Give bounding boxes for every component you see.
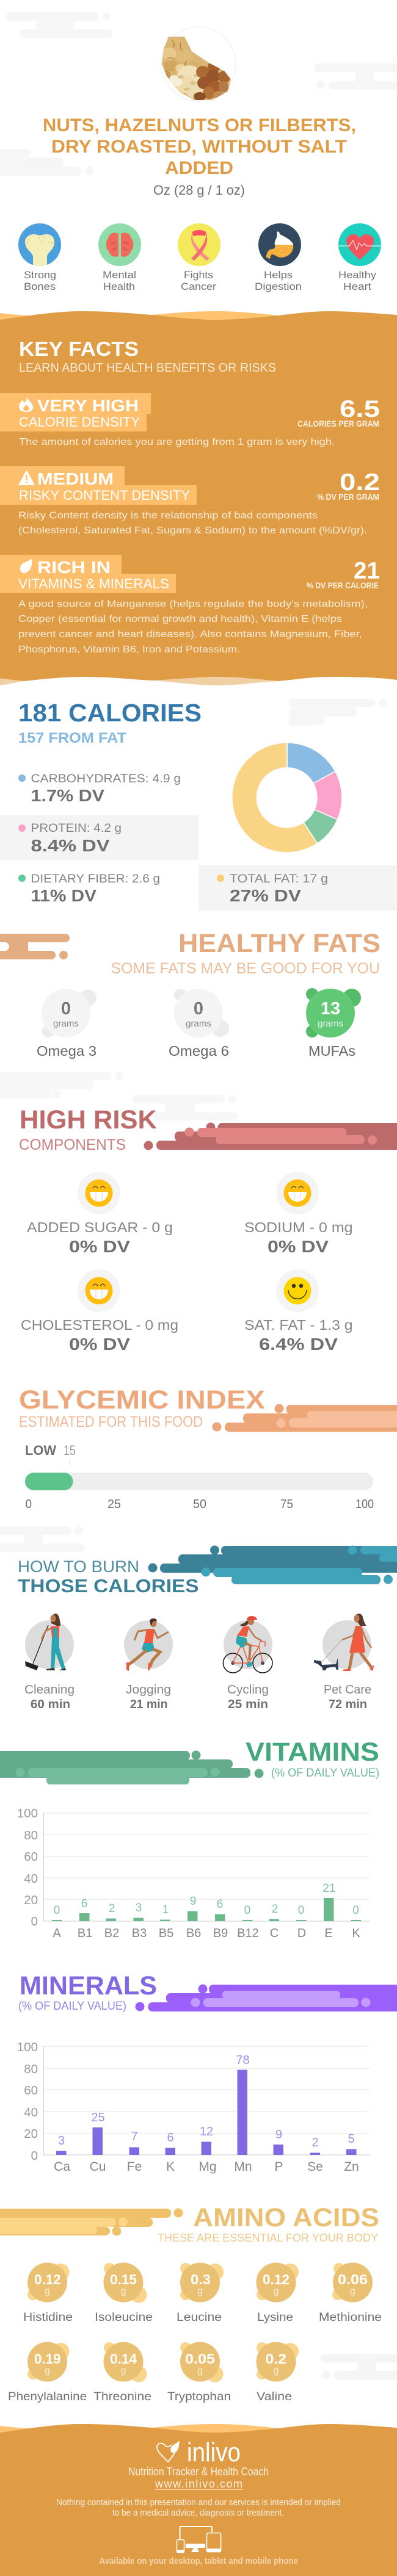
fact: rich in vitamins and minerals: VITAMINS & MINERALS [18,576,169,591]
logo: inlivo [157,2437,241,2467]
fact: risky content density: 0.2 [340,469,380,496]
amino: histidine: g [45,2286,50,2296]
burn heading: THOSE CALORIES [18,1575,199,1596]
amino: methionine: Methionine [319,2311,382,2324]
bar chart: minerals: Ca [54,2160,70,2174]
stat: omega 6 [169,989,229,1059]
key facts heading: KEY FACTS [19,337,139,360]
risk: saturated fat: SAT. FAT - 1.3 g [244,1317,353,1333]
risk: added sugar: ADDED SUGAR - 0 g [27,1219,173,1235]
risk: saturated fat [244,1269,353,1354]
bar chart: vitamins: B12 [237,1927,259,1940]
legend: carbohydrates: 1.7% DV [31,786,104,805]
legend: total fat: TOTAL FAT: 17 g [230,873,328,886]
tagline and link: www.inlivo.com [155,2478,242,2490]
fact: risky content density: MEDIUM [37,469,114,488]
bar chart: minerals: 12 [200,2125,213,2138]
bar chart: minerals: 100 [17,2040,38,2054]
risk: sodium: SODIUM - 0 mg [244,1219,353,1235]
high risk heading: COMPONENTS [19,1136,126,1153]
icon: grin face [283,1179,311,1207]
bar chart: vitamins: D [297,1927,306,1940]
highlight panels [0,815,397,911]
label: mental health: Mental [103,269,136,281]
panel: amino acids [0,2203,382,2403]
amino: leucine: g [197,2286,203,2296]
minerals heading [18,1971,157,2013]
bar chart: vitamins: C [270,1927,279,1940]
stat: omega 3 [37,989,97,1059]
panel: healthy fats [0,929,381,1059]
bar chart: minerals: 40 [24,2105,38,2120]
icon: grin face [86,1179,112,1207]
bar chart: minerals: 0 [31,2149,38,2163]
glycemic value: 15 [64,1443,76,1458]
stat: MUFAs: MUFAs [308,1043,355,1059]
fact: rich in vitamins and minerals: Copper (essential for normal growth and health), Vitamin E (helps [18,614,342,624]
fact: calorie density: 6.5 [340,396,380,422]
decorative band: purple [136,1985,397,2011]
vitamins heading: VITAMINS [246,1737,379,1767]
decorative band: yellow [0,2208,183,2236]
bar chart: minerals: 20 [24,2127,38,2141]
decorative band: orange [213,1404,397,1432]
glycemic heading: GLYCEMIC INDEX [19,1385,265,1415]
bar chart: minerals: 80 [24,2062,38,2076]
decorative band: green [0,1750,264,1784]
fact: calorie density: VERY HIGH [37,396,139,415]
panel: high risk components [19,1105,397,1354]
gauge axis: 100 [355,1498,374,1511]
bar chart: vitamins: K [352,1927,360,1940]
icon: person cycling [223,1616,272,1673]
bar chart: vitamins: 0 [298,1904,304,1917]
key facts heading: LEARN ABOUT HEALTH BENEFITS OR RISKS [19,361,276,375]
minerals heading: MINERALS [20,1971,157,2001]
bar chart: vitamins: 0 [31,1914,38,1928]
bar chart: minerals: Cu [90,2160,106,2174]
background cloud: calories [289,699,387,726]
bar chart: vitamins: B1 [78,1927,92,1940]
legend: total fat [217,873,328,905]
bar chart: minerals [17,2040,370,2174]
label: helps digestion: Helps [264,269,293,281]
risk: cholesterol [21,1269,178,1354]
panel: vitamins [0,1737,379,1940]
amino: isoleucine: g [121,2286,126,2296]
bar chart: vitamins: 1 [162,1903,169,1916]
label: healthy heart: Healthy [338,269,377,281]
amino: tryptophan: g [197,2365,203,2376]
risk: sodium: 0% DV [268,1237,329,1256]
bar chart: minerals: 7 [131,2130,138,2143]
label: mental health [103,269,136,292]
availability note: Available on your desktop, tablet and mobile phone [99,2556,298,2566]
label: healthy heart [338,269,377,292]
title: ADDED [165,158,233,178]
bar chart: vitamins: 60 [24,1850,38,1864]
fact: risky content density: RISKY CONTENT DENSITY [19,488,190,503]
decorative band: red [144,1123,397,1150]
vitamins heading [246,1737,379,1780]
bar chart: vitamins: B9 [213,1927,228,1940]
panel: how to burn those calories [18,1545,397,1711]
bar chart: minerals: P [274,2160,283,2174]
fact: calorie density: CALORIE DENSITY [19,414,140,430]
amino acids heading: AMINO ACIDS [193,2203,379,2232]
icon: devices [177,2527,221,2552]
logo: inlivo: inlivo [187,2437,241,2467]
disclaimer: Nothing contained in this presentation and our services is intended or implied [56,2498,341,2508]
bar chart: minerals: Mg [198,2160,217,2174]
label: strong bones: Strong [24,269,56,281]
amino: tryptophan: 0.05 [185,2351,215,2367]
bar chart: vitamins: 6 [81,1897,87,1910]
hero image: mixed nuts in circle [159,26,236,104]
amino: tryptophan [167,2342,231,2403]
glycemic value: LOW [25,1443,56,1458]
healthy fats heading: HEALTHY FATS [178,929,381,958]
gauge axis: 75 [280,1498,293,1511]
amino: histidine: 0.12 [34,2271,61,2287]
bar chart: vitamins: 2 [272,1903,278,1916]
amino: threonine: Threonine [93,2390,151,2403]
amino: leucine: 0.3 [191,2271,211,2287]
panel: glycemic index [19,1385,397,1511]
bar chart: vitamins: 3 [136,1902,142,1914]
bar chart: minerals: Se [307,2160,323,2174]
icon: leaf [20,558,32,573]
gauge axis: 0 [26,1498,32,1511]
gauge axis [26,1498,374,1511]
amino: valine: 0.2 [265,2351,286,2367]
donut chart [232,743,342,853]
amino: phenylalanine [8,2342,87,2403]
fact: rich in vitamins and minerals: Phosphorus, Vitamin B6, Iron and Potassium. [18,644,240,655]
amino acids heading: THESE ARE ESSENTIAL FOR YOUR BODY [158,2231,378,2244]
amino: isoleucine: 0.15 [110,2271,137,2287]
burn heading: HOW TO BURN [18,1557,139,1576]
bar chart: vitamins: 40 [24,1872,38,1886]
bar chart: vitamins: B6 [186,1927,201,1940]
high risk heading [19,1105,157,1153]
label: fights cancer [181,269,216,292]
bar chart: minerals: K [166,2160,175,2174]
amino: valine [257,2342,299,2403]
activity: cleaning: 60 min [31,1698,70,1711]
activity: pet care: 72 min [329,1698,367,1711]
fact: rich in vitamins and minerals: % DV PER CALORIE [307,580,379,590]
minerals heading: (% OF DAILY VALUE) [18,2000,126,2013]
glycemic heading [19,1385,265,1431]
bar chart: minerals: 78 [236,2054,250,2067]
icon: flame [19,397,33,412]
risk: cholesterol: 0% DV [69,1335,130,1354]
bar chart: minerals: 60 [24,2084,38,2098]
amino: phenylalanine: 0.19 [34,2351,61,2367]
fact: rich in vitamins and minerals [0,555,380,655]
bar chart: vitamins: 0 [244,1904,250,1917]
calories heading: 157 FROM FAT [18,730,126,746]
amino: isoleucine [95,2263,153,2324]
glycemic gauge [25,1473,373,1490]
amino acids heading [158,2203,379,2244]
bar chart: minerals: 6 [167,2131,174,2145]
bar chart: vitamins: A [53,1927,61,1940]
label: helps digestion: Digestion [255,281,302,292]
fact: calorie density [0,393,380,447]
gauge axis: 50 [193,1498,206,1511]
title: NUTS, HAZELNUTS OR FILBERTS, [43,115,356,135]
risk: sodium [244,1172,353,1256]
background cloud: burn [0,1526,85,1552]
bar chart: minerals: 25 [91,2111,105,2124]
bar chart: minerals: 5 [348,2132,355,2146]
stat: omega 6: 0 [194,999,203,1019]
stat: MUFAs: 13 [321,999,340,1019]
amino: lysine: g [274,2286,279,2296]
fact: calorie density: CALORIES PER GRAM [297,419,379,428]
title: DRY ROASTED, WITHOUT SALT [51,137,347,157]
stat: omega 3: grams [53,1019,79,1029]
amino: histidine: Histidine [23,2311,73,2324]
label: strong bones [24,269,56,292]
bar chart: minerals: Mn [234,2160,252,2174]
stat: MUFAs: grams [318,1019,343,1029]
icon: grin face [86,1277,112,1305]
stat: omega 6: grams [186,1019,211,1029]
fact: rich in vitamins and minerals: RICH IN [37,558,111,577]
glycemic value [25,1443,76,1465]
bar chart: minerals: Fe [127,2160,142,2174]
background cloud: amino acids [320,2354,397,2379]
bar chart: vitamins: 0 [54,1904,60,1917]
bar chart: vitamins [17,1806,370,1940]
activity: cycling [223,1616,272,1711]
bar chart: vitamins: B2 [104,1927,119,1940]
icon: person sweeping [25,1614,66,1670]
burn heading [18,1557,199,1596]
activity: jogging: Jogging [126,1683,171,1697]
bar chart: minerals: 9 [275,2128,282,2141]
amino: leucine: Leucine [177,2311,222,2324]
bar chart: vitamins: 0 [352,1904,359,1917]
amino: phenylalanine: Phenylalanine [8,2390,87,2403]
decorative band: teal [148,1545,397,1584]
panel: footer [0,2424,397,2576]
bar chart: vitamins: 80 [24,1828,38,1842]
bar chart: vitamins: 21 [322,1882,336,1895]
panel: key facts [0,311,397,685]
label: fights cancer: Cancer [181,281,216,292]
background clouds: header [0,12,397,176]
amino: threonine [93,2342,151,2403]
activity: jogging: 21 min [130,1698,167,1711]
amino: lysine [257,2263,299,2324]
disclaimer: to be a medical advice, diagnosis or treatment. [112,2508,284,2518]
legend: dietary fiber: 11% DV [31,886,97,905]
fact: risky content density [0,466,380,536]
stat: omega 6: Omega 6 [169,1043,229,1059]
amino: methionine: g [350,2286,355,2296]
calories heading [18,699,202,746]
icon: smile face [283,1277,311,1305]
legend: total fat: 27% DV [230,886,301,905]
label: strong bones: Bones [24,281,56,292]
label: mental health: Health [103,281,135,292]
activity: cleaning [24,1614,75,1711]
healthy fats heading [111,929,381,977]
legend: protein [18,822,122,855]
stat: omega 3: 0 [61,999,71,1019]
label: helps digestion [255,269,302,292]
icon: person walking dog [314,1614,374,1671]
icon: strong bones [18,223,61,269]
activity: cycling: 25 min [228,1698,268,1711]
tagline and link: Nutrition Tracker & Health Coach [128,2466,269,2478]
legend: protein: 8.4% DV [31,836,110,855]
label: healthy heart: Heart [343,281,371,292]
decorative band: tan [0,934,70,959]
glycemic heading: ESTIMATED FOR THIS FOOD [19,1413,203,1431]
icon: healthy heart [338,223,381,266]
background clouds: high risk [0,1072,238,1120]
icon: warning triangle [18,470,35,485]
risk: added sugar: 0% DV [69,1237,130,1256]
tagline and link [128,2466,269,2490]
bar chart: vitamins: E [324,1927,333,1940]
amino: histidine [23,2263,73,2324]
bar chart: vitamins: 6 [217,1898,223,1911]
vitamins heading: (% OF DAILY VALUE) [271,1767,379,1780]
activity: cycling: Cycling [227,1683,269,1697]
amino: isoleucine: Isoleucine [95,2311,153,2324]
panel: minerals [17,1971,397,2174]
panel: calories [0,699,397,911]
fact: rich in vitamins and minerals: 21 [354,558,380,584]
calories heading: 181 CALORIES [18,699,202,727]
amino: lysine: 0.12 [263,2271,290,2287]
bar chart: vitamins: B3 [132,1927,147,1940]
disclaimer [56,2498,341,2518]
fact: rich in vitamins and minerals: A good source of Manganese (helps regulate the body’s metabolism), [18,599,368,609]
stat: omega 3: Omega 3 [37,1043,97,1059]
legend: dietary fiber: DIETARY FIBER: 2.6 g [31,873,160,886]
legend: dietary fiber [18,873,160,905]
amino: methionine: 0.06 [338,2271,368,2287]
activity: jogging [124,1618,173,1711]
fact: rich in vitamins and minerals: prevent cancer and heart diseases). Also contains Magnesium, Fiber, [18,629,362,640]
high risk heading: HIGH RISK [20,1105,157,1135]
activity: pet care: Pet Care [324,1683,371,1697]
activity: cleaning: Cleaning [24,1683,75,1697]
legend: carbohydrates [18,773,181,805]
legend: carbohydrates: CARBOHYDRATES: 4.9 g [31,773,181,785]
bar chart: minerals: Zn [344,2160,359,2174]
benefits row [18,223,381,292]
key facts heading [19,337,276,375]
amino: valine: g [274,2365,279,2376]
stat: MUFAs [306,988,361,1059]
activity: pet care [314,1614,374,1711]
icon: mental health [98,223,141,266]
amino: threonine: 0.14 [110,2351,137,2367]
fact: risky content density: (Cholesterol, Saturated Fat, Sugars & Sodium) to the amount (%DV/gr). [18,525,367,536]
bar chart: minerals: 3 [58,2134,65,2148]
healthy fats heading: SOME FATS MAY BE GOOD FOR YOU [111,960,380,977]
legend: protein: PROTEIN: 4.2 g [31,822,122,835]
fact: calorie density: The amount of calories you are getting from 1 gram is very high. [19,437,335,447]
amino: lysine: Lysine [257,2311,293,2324]
fact: risky content density: Risky Content density is the relationship of bad components [18,510,318,521]
amino: valine: Valine [257,2390,292,2403]
bar chart: minerals: 2 [311,2136,319,2149]
amino: methionine [319,2263,382,2324]
icon: helps digestion [258,223,301,266]
title [43,115,356,178]
risk: saturated fat: 6.4% DV [259,1335,338,1354]
amino: tryptophan: Tryptophan [167,2390,231,2403]
amino: threonine: g [121,2365,126,2376]
gauge axis: 25 [107,1498,121,1511]
risk: cholesterol: CHOLESTEROL - 0 mg [21,1317,178,1333]
bar chart: vitamins: B5 [159,1927,173,1940]
amino: leucine [177,2263,224,2324]
icon: fights cancer [178,223,220,266]
bar chart: vitamins: 2 [109,1902,115,1915]
bar chart: vitamins: 100 [17,1806,38,1820]
icon: person jogging [126,1618,169,1671]
fact: risky content density: % DV PER GRAM [317,492,379,502]
bar chart: vitamins: 9 [190,1895,196,1908]
serving size: Oz (28 g / 1 oz) [153,182,245,198]
amino: phenylalanine: g [45,2365,50,2376]
risk: added sugar [27,1172,173,1256]
bar chart: vitamins: 20 [24,1893,38,1907]
label: fights cancer: Fights [184,269,213,281]
